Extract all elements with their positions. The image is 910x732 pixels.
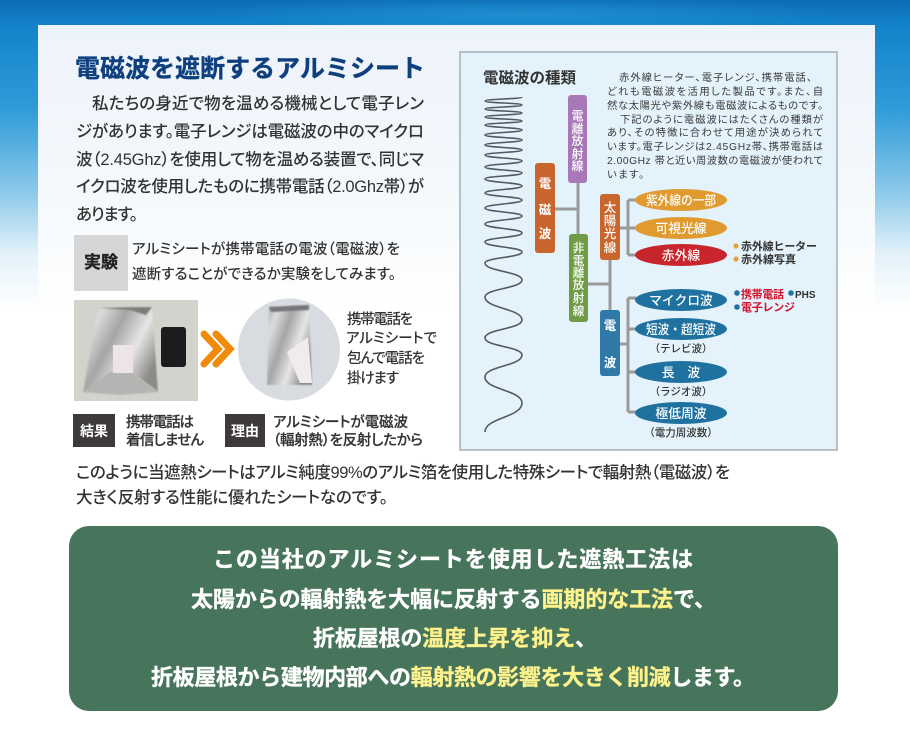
panel: types of electromagnetic waves	[460, 52, 837, 450]
microwave uses	[734, 287, 816, 314]
callout: green conclusion panel: この当社のアルミシートを使用した遮熱工法は	[213, 547, 693, 572]
experiment label: 実験	[84, 253, 118, 272]
box: sunlight: 線	[604, 240, 617, 255]
panel description: あり、その特徴に合わせて用途が決められて	[607, 126, 823, 139]
result text	[126, 414, 204, 449]
ellipse: part of ultraviolet	[635, 189, 727, 211]
callout: green conclusion panel	[69, 526, 838, 711]
photo: phone wrapped in sheet	[238, 298, 340, 400]
box: electromagnetic wave: 波	[539, 226, 552, 241]
intro text block: 波（2.45Ghz）を使用して物を温める装置で、同じマ	[76, 150, 424, 169]
ellipse: extremely low frequency	[635, 402, 727, 439]
reason text: アルミシートが電磁波	[273, 413, 408, 431]
microwave uses: 携帯電話	[741, 287, 784, 301]
microwave uses: 電子レンジ	[741, 301, 795, 314]
box: sunlight: 太	[604, 200, 617, 215]
connector lines	[555, 183, 636, 412]
photo caption: 携帯電話を	[347, 311, 413, 328]
panel description: います。電子レンジは2.45GHz帯、携帯電話は	[607, 140, 823, 153]
experiment text: 遮断することができるか実験をしてみます。	[132, 265, 396, 283]
microwave uses: PHS	[795, 290, 816, 301]
ellipse: long wave: 長 波	[662, 365, 700, 380]
experiment label	[74, 235, 128, 291]
photo caption: 掛けます	[347, 370, 399, 387]
panel description: 2.00GHz 帯と近い周波数の電磁波が使われて	[607, 154, 823, 167]
result label: 結果	[80, 423, 108, 439]
box: ionizing radiation: 射	[571, 146, 584, 161]
sky highlight	[200, 0, 840, 32]
infrared uses: 赤外線写真	[741, 252, 796, 266]
box: non-ionizing radiation: 射	[573, 291, 585, 305]
intro text block: あります。	[76, 205, 138, 224]
ellipse: short wave: （テレビ波）	[650, 342, 712, 355]
ellipse: long wave: （ラジオ波）	[650, 385, 712, 398]
ellipse: extremely low frequency: 極低周波	[655, 406, 707, 421]
panel description	[607, 71, 824, 181]
intro text block	[76, 94, 425, 224]
panel description: います。	[607, 169, 644, 181]
experiment text	[132, 240, 400, 283]
panel heading: 電磁波の種類	[483, 69, 576, 87]
photo caption: 包んで電話を	[347, 350, 425, 367]
box: electromagnetic wave	[535, 163, 555, 253]
box: radio wave	[600, 310, 620, 376]
wave diagram: wavelength coil	[485, 97, 522, 432]
ellipse: part of ultraviolet: 紫外線の一部	[646, 193, 716, 208]
box: ionizing radiation: 電	[571, 109, 584, 123]
reason label	[225, 414, 265, 447]
callout: green conclusion panel: 折板屋根から建物内部への輻射熱の影響を大きく削減します。	[151, 665, 755, 690]
arrow: orange chevrons	[204, 334, 230, 364]
photo caption	[346, 311, 437, 387]
result text: 着信しません	[126, 432, 204, 449]
reason text	[273, 413, 423, 449]
panel description: どれも電磁波を活用した製品です。また、自	[607, 85, 823, 98]
box: ionizing radiation: 離	[571, 121, 584, 136]
infrared uses: 赤外線ヒーター	[741, 239, 817, 253]
box: non-ionizing radiation	[569, 234, 588, 322]
ellipse: long wave	[635, 361, 727, 398]
ellipse: microwave	[635, 289, 727, 311]
panel description: 然な太陽光や紫外線も電磁波によるものです。	[607, 99, 823, 112]
callout: green conclusion panel: 太陽からの輻射熱を大幅に反射する画期的な工法で、	[191, 587, 716, 612]
callout: green conclusion panel: 折板屋根の温度上昇を抑え、	[313, 626, 597, 651]
box: non-ionizing radiation: 離	[573, 266, 585, 280]
box: sunlight: 陽	[604, 213, 617, 228]
reason text: （輻射熱）を反射したから	[273, 432, 423, 449]
ellipse: visible light	[635, 217, 727, 239]
panel description: 下記のように電磁波にはたくさんの種類が	[620, 113, 824, 126]
panel description: 赤外線ヒーター、電子レンジ、携帯電話、	[619, 71, 812, 84]
summary text: 大きく反射する性能に優れたシートなのです。	[76, 488, 388, 507]
box: radio wave: 波	[604, 355, 617, 370]
result text: 携帯電話は	[126, 414, 194, 431]
box: sunlight: 光	[604, 226, 617, 241]
ellipse: short wave: 短波・超短波	[646, 322, 716, 337]
box: electromagnetic wave: 磁	[539, 203, 552, 217]
intro text block: イクロ波を使用したものに携帯電話（2.0Ghz帯）が	[76, 176, 425, 196]
reason label: 理由	[231, 423, 259, 439]
ellipse: microwave: マイクロ波	[649, 293, 713, 308]
intro text block: ジがあります。電子レンジは電磁波の中のマイクロ	[76, 121, 424, 141]
intro text block: 私たちの身近で物を温める機械として電子レン	[92, 94, 424, 113]
photo: aluminium sheet and phone	[74, 300, 198, 401]
ellipse: short wave	[635, 318, 727, 355]
infrared uses	[733, 239, 817, 266]
ellipse: infrared: 赤外線	[662, 248, 700, 263]
summary text	[76, 463, 730, 507]
title: 電磁波を遮断するアルミシート	[75, 55, 425, 83]
box: non-ionizing radiation: 放	[573, 278, 585, 292]
ellipse: infrared	[635, 244, 727, 266]
experiment text: アルミシートが携帯電話の電波（電磁波）を	[132, 240, 400, 258]
summary text: このように当遮熱シートはアルミ純度99%のアルミ箔を使用した特殊シートで輻射熱（電磁波）を	[76, 463, 730, 482]
ellipse: visible light: 可視光線	[655, 221, 707, 236]
white content sheet	[38, 25, 875, 310]
box: electromagnetic wave: 電	[539, 177, 552, 191]
result label	[73, 414, 115, 447]
box: non-ionizing radiation: 電	[573, 254, 585, 268]
ellipse: extremely low frequency: （電力周波数）	[644, 426, 718, 439]
box: ionizing radiation	[568, 95, 587, 183]
box: non-ionizing radiation: 線	[573, 304, 585, 318]
box: sunlight	[600, 194, 620, 260]
box: ionizing radiation: 線	[571, 158, 584, 173]
box: non-ionizing radiation: 非	[573, 241, 585, 255]
photo caption: アルミシートで	[346, 331, 437, 347]
background: blue sky	[0, 0, 910, 310]
box: radio wave: 電	[604, 319, 617, 333]
box: ionizing radiation: 放	[571, 133, 584, 148]
